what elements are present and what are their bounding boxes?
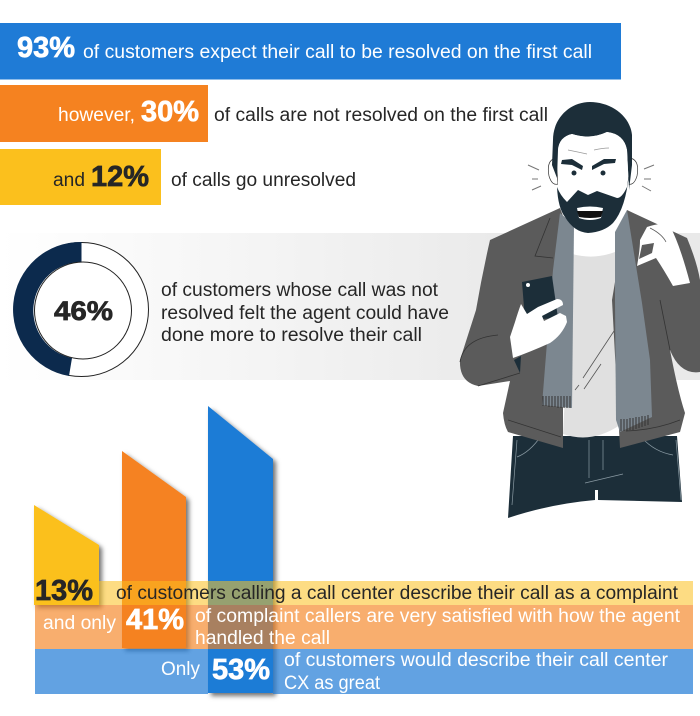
shirt: [562, 225, 620, 435]
column: yellow: [34, 505, 99, 605]
strip: blue left: [35, 649, 208, 694]
strip: orange: [35, 605, 693, 649]
stat: 13%: of customers calling a call center describe their call as a complaint: [116, 583, 679, 604]
strip: yellow: [99, 581, 693, 605]
jacket: [460, 208, 572, 448]
stat bar: 12%: [0, 149, 356, 205]
column: blue: [208, 406, 273, 693]
donut chart: 46%: [13, 242, 148, 376]
illustration: frustrated man with phone: [460, 102, 700, 518]
stat bar: 93%: [0, 23, 621, 80]
stat bar: 30%: 30%: [141, 96, 199, 128]
eyebrows: [561, 159, 616, 170]
stat: 53%: Only: [161, 659, 200, 680]
sleeve cuff shadow: [514, 356, 521, 373]
stat: 41%: and only: [43, 613, 116, 634]
eyes: [572, 170, 576, 176]
stat bar: 93%: 93%: [17, 32, 75, 64]
stat: 53%: [161, 650, 669, 694]
jacket seams: [460, 218, 680, 437]
hand raised: [637, 224, 690, 286]
stat: 53%: CX as great: [284, 673, 381, 694]
jeans: [508, 436, 682, 518]
mouth: [577, 206, 603, 220]
stat: 13%: [35, 575, 679, 607]
stat bar: 12%: and: [53, 170, 85, 191]
stat: 53%: 53%: [212, 654, 270, 686]
stat: 53%: of customers would describe their call center: [284, 650, 669, 671]
text block: 46% description: done more to resolve their call: [161, 325, 422, 346]
text block: 46% description: resolved felt the agent could have: [161, 303, 449, 324]
stat: 13%: 13%: [35, 575, 93, 607]
stat bar: 30%: however,: [58, 105, 135, 126]
stat bar: 12%: of calls go unresolved: [171, 170, 356, 191]
shake lines: [528, 165, 654, 191]
hand holding phone: [510, 299, 567, 358]
forehead lines: [568, 148, 609, 154]
face: [558, 132, 629, 204]
stat bar: 30%: of calls are not resolved on the first call: [214, 105, 548, 126]
ears: [548, 158, 638, 184]
phone: [522, 276, 558, 320]
strip: blue right: [273, 649, 693, 694]
panel: grey band: [0, 233, 700, 380]
column: orange: [122, 451, 186, 648]
beard: [557, 173, 629, 233]
shirt glare lines: [575, 331, 614, 390]
hair: [552, 102, 632, 190]
stat bar: 93%: of customers expect their call to be resolved on the first call: [83, 42, 592, 63]
scarf: [542, 213, 574, 408]
stat: 41%: 41%: [126, 604, 184, 636]
text block: 46% description: [161, 280, 449, 346]
stat bar: 30%: [0, 85, 548, 142]
jeans seams: [512, 436, 681, 505]
stat: 41%: handled the call: [195, 628, 330, 649]
stat: 41%: of complaint callers are very satisfied with how the agent: [195, 606, 681, 627]
stat: 41%: [43, 604, 681, 649]
stat bar: 12%: 12%: [91, 161, 149, 193]
donut chart: 46%: 46%: [54, 296, 113, 326]
text block: 46% description: of customers whose call was not: [161, 280, 439, 301]
